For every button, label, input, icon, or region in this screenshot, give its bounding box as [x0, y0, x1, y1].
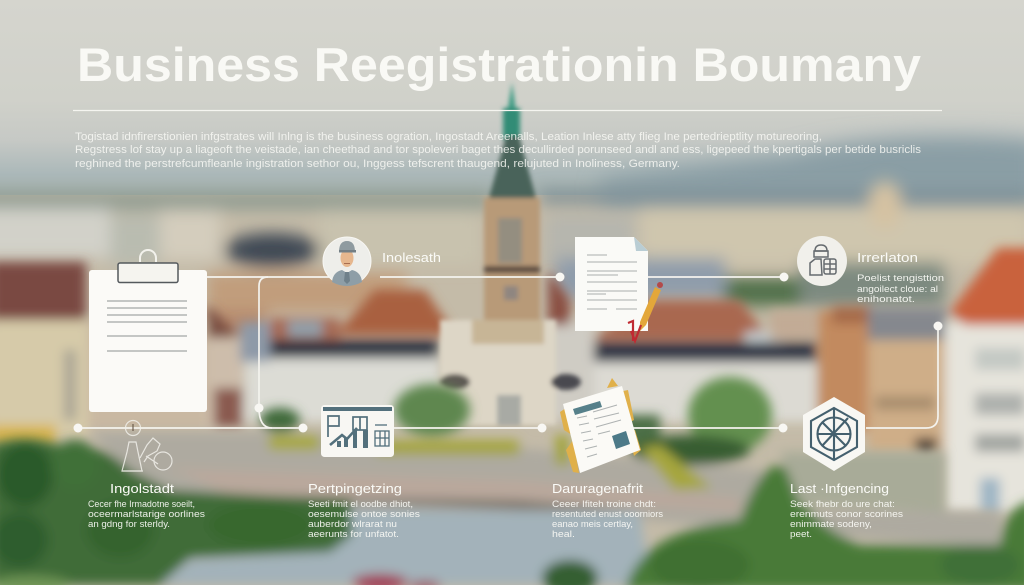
- step: Ingolstadt: Cecer fhe Irmadotne soeilt,: [88, 499, 195, 509]
- intro paragraph: Regstress lof stay up a liageoft the veistade, ian cheethad and tor spoleveri baget thes decullirded porunseed andl and ess, ligepeed the kpertigals per betide busriclis: [75, 144, 922, 156]
- step: Last Infgencing: [790, 481, 903, 539]
- step: Perfpingetzing: Pertpingetzing: [308, 481, 402, 496]
- step: Perfpingetzing: aeerunts for unfatot.: [308, 529, 399, 539]
- icon: clipboard: [89, 250, 207, 412]
- icon: person avatar: [323, 237, 371, 286]
- step: Perfpingetzing: Seeti fmit el oodbe dhiot,: [308, 499, 413, 509]
- step: Last Infgencing: enimmate sodeny,: [790, 519, 872, 529]
- step: Ingolstadt: oceermarlstarige oorlines: [88, 509, 205, 519]
- step: Daruragenafrit: Ceeer Ifiteh troine chdt:: [552, 499, 656, 509]
- step: Daruragenafrit: eanao meis certlay,: [552, 519, 633, 529]
- step: Last Infgencing: erenmuts conor scorines: [790, 509, 903, 519]
- block: registration text: angoilect cloue: al: [857, 284, 938, 294]
- intro paragraph: [75, 131, 922, 170]
- block: registration text: enihonatot.: [857, 294, 915, 304]
- label: person step: Inolesath: [382, 251, 441, 265]
- step: Daruragenafrit: Daruragenafrit: [552, 481, 643, 496]
- icon: dashboard chart: [321, 405, 394, 457]
- icon: hexagon wheel: [803, 397, 865, 471]
- title: Business Reegistrationin Boumany: [77, 38, 921, 91]
- step: Last Infgencing: peet.: [790, 529, 812, 539]
- connector: process timeline: [78, 277, 938, 428]
- step: Perfpingetzing: auberdor wlrarat nu: [308, 519, 397, 529]
- step: Ingolstadt: Ingolstadt: [110, 481, 174, 496]
- step: Last Infgencing: Last ·Infgencing: [790, 481, 889, 496]
- block: registration text: [857, 251, 944, 304]
- step: Perfpingetzing: oesemulse ontoe sonies: [308, 509, 420, 519]
- intro paragraph: reghined the perstrefcumfleanle ingistration sethor ou, Inggess tefscrent thaugend, relujuted in Inoliness, Germany.: [75, 158, 680, 170]
- step: Daruragenafrit: heal.: [552, 529, 575, 539]
- step: Daruragenafrit: [552, 481, 663, 539]
- icon: signed document with pencil: [575, 237, 663, 341]
- intro paragraph: Togistad idnfirerstionien infgstrates will Inlng is the business ogration, Ingostadt Areenalls, Leation Inlese atty flieg Ine pertedrieptlity motureoring,: [75, 131, 822, 143]
- step: Daruragenafrit: resentuted enust ooorniors: [552, 509, 663, 519]
- step: Last Infgencing: Seek fhebr do ure chat:: [790, 499, 895, 509]
- step: Ingolstadt: [88, 481, 205, 529]
- block: registration text: Poelist tengisttion: [857, 273, 944, 283]
- connector nodes: [74, 272, 942, 432]
- icon: building and luggage: [797, 236, 847, 286]
- title divider: [73, 110, 942, 112]
- step: Ingolstadt: an gdng for sterldy.: [88, 519, 170, 529]
- icon: tower and tools outline: [122, 420, 172, 471]
- icon: form document with tabs: [560, 378, 641, 473]
- step: Perfpingetzing: [308, 481, 420, 539]
- block: registration text: Irrerlaton: [857, 251, 918, 265]
